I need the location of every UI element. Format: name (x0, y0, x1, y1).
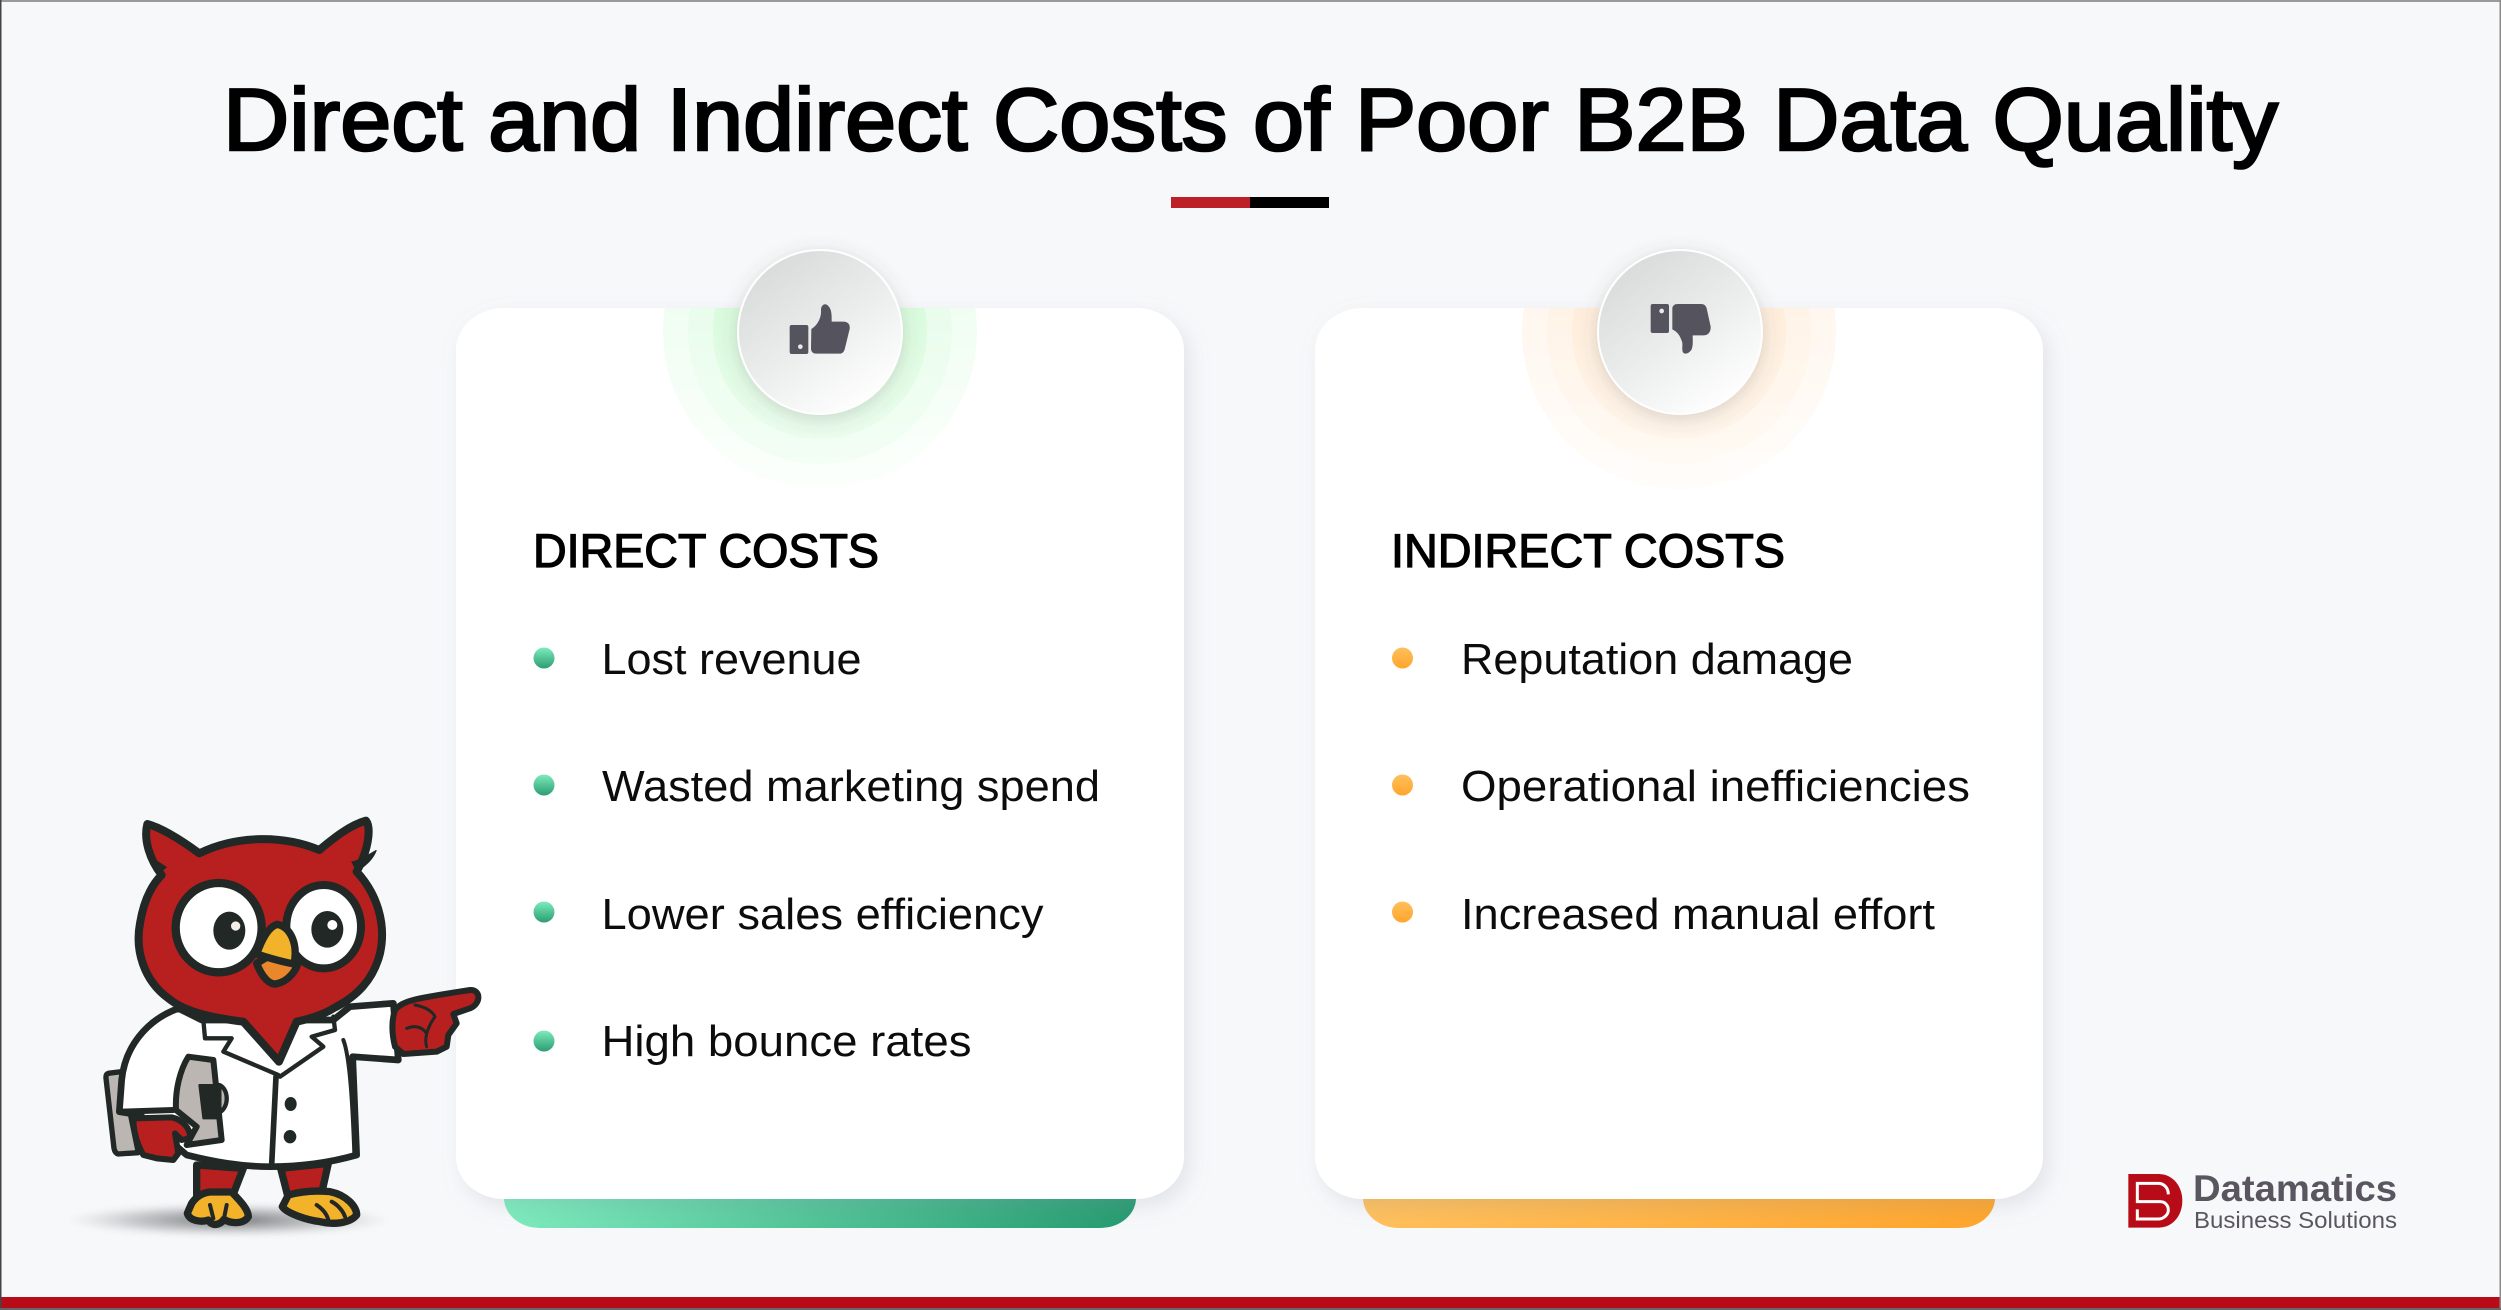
right eye (286, 885, 361, 968)
icon: thumbs up (790, 304, 850, 354)
list item: high bounce rates: High bounce rates (602, 1017, 972, 1066)
clipboard back (106, 1072, 138, 1154)
title underline accent (1171, 197, 1329, 208)
left eye (176, 883, 262, 972)
heading: indirect costs: INDIRECT COSTS (1391, 524, 1785, 577)
list item: lost revenue: Lost revenue (602, 635, 862, 684)
logo tagline: Business Solutions (2194, 1207, 2397, 1233)
green halo rings (663, 308, 977, 464)
ground shadow (65, 1203, 392, 1237)
panel: indirect costs (1315, 175, 2043, 1228)
list item: operational inefficiencies: Operational inefficiencies (1461, 762, 1970, 811)
head (139, 821, 382, 1062)
direct costs card (456, 308, 1184, 1199)
toe lines (210, 1202, 345, 1220)
clipboard front (176, 1057, 227, 1145)
bottom red bar (0, 1297, 2501, 1308)
left hand (133, 1117, 190, 1160)
indirect costs card (1315, 308, 2043, 1199)
ear tufts (147, 851, 376, 874)
green bottom band (504, 1150, 1136, 1228)
lab coat (119, 1003, 398, 1167)
pointing hand (392, 990, 478, 1054)
title: Direct and Indirect Costs of Poor B2B Data Quality (223, 70, 2278, 169)
coat details (203, 1017, 354, 1165)
feet (187, 1191, 357, 1224)
icon: thumbs down (1651, 304, 1711, 354)
orange halo rings (1522, 308, 1836, 464)
logo mark (2128, 1174, 2182, 1228)
beak (257, 924, 297, 984)
list item: reputation damage: Reputation damage (1461, 635, 1853, 684)
list item: increased manual effort: Increased manual effort (1461, 890, 1935, 939)
list item: wasted marketing spend: Wasted marketing spend (602, 762, 1100, 811)
list item: lower sales efficiency: Lower sales efficiency (602, 890, 1044, 939)
logo: Datamatics (2128, 1168, 2397, 1233)
panel: direct costs (456, 175, 1184, 1228)
coat buttons (284, 1097, 297, 1143)
legs (197, 1163, 328, 1198)
owl mascot (65, 821, 478, 1237)
icon disc (738, 250, 902, 414)
orange bottom band (1363, 1150, 1995, 1228)
coat arm lower edge (122, 1110, 173, 1112)
logo wordmark: Datamatics (2193, 1168, 2397, 1209)
icon disc (1598, 250, 1762, 414)
heading: direct costs: DIRECT COSTS (533, 524, 879, 577)
